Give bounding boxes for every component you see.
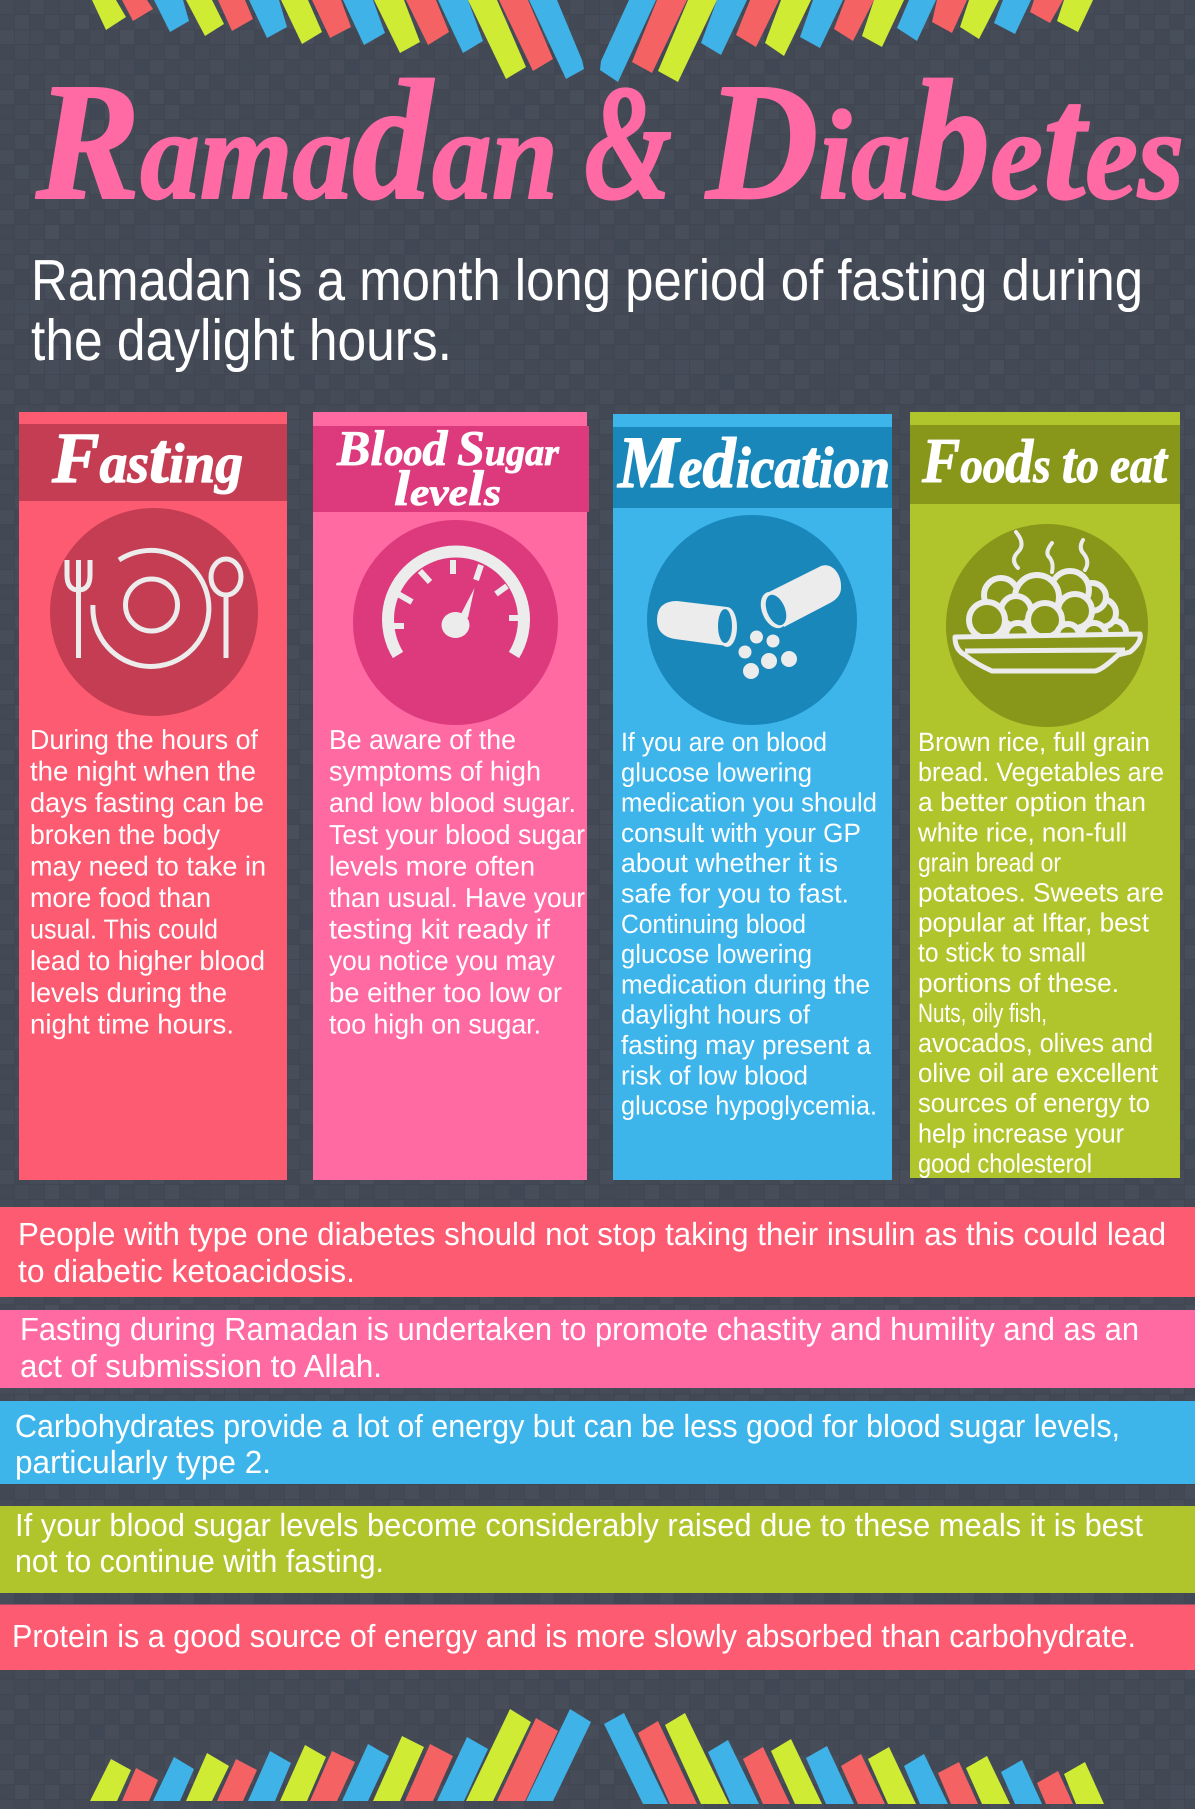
body text: fasting: night time hours. — [30, 1008, 234, 1039]
panel heading: blood sugar levels — [313, 420, 589, 516]
icon: gauge — [353, 520, 558, 725]
body text: foods to eat: portions of these. — [918, 968, 1119, 998]
title: Ramadan — [35, 46, 558, 236]
body text: blood sugar levels: and low blood sugar. — [329, 787, 576, 818]
fact bar: type one diabetes — [0, 1207, 1195, 1297]
body text: medication: consult with your GP — [621, 818, 861, 848]
body text: foods to eat: popular at Iftar, best — [918, 908, 1150, 938]
icon: steaming plate of food — [946, 524, 1148, 727]
body text: medication: about whether it is — [621, 848, 838, 878]
body text: fasting: days fasting can be — [30, 787, 264, 818]
icon: plate with fork and spoon — [50, 508, 258, 716]
top ribbon decoration: right — [600, 0, 1093, 82]
body text: medication: safe for you to fast. — [621, 878, 849, 908]
icon: open capsule pill — [647, 515, 857, 725]
fact bar: carbohydrates: particularly type 2. — [15, 1444, 271, 1480]
panel: medication — [613, 414, 892, 1180]
body text: foods to eat: sources of energy to — [918, 1088, 1150, 1118]
body text: blood sugar levels: too high on sugar. — [329, 1008, 541, 1039]
body text: blood sugar levels: levels more often — [329, 850, 535, 881]
body text: foods to eat: to stick to small — [918, 938, 1086, 968]
fact bar: type one diabetes: People with type one diabetes should not stop taking their insulin as this could lead — [18, 1216, 1166, 1252]
body text: blood sugar levels: Be aware of the — [329, 724, 516, 755]
fact bar: raised blood sugar — [0, 1506, 1195, 1593]
body text: foods to eat: Brown rice, full grain — [918, 727, 1150, 757]
body text: blood sugar levels: than usual. Have your — [329, 882, 585, 913]
body text: foods to eat: bread. Vegetables are — [918, 757, 1164, 787]
body text: fasting: lead to higher blood — [30, 945, 265, 976]
bottom ribbon decoration: left — [90, 1709, 591, 1801]
title — [35, 46, 1184, 236]
panel: blood sugar levels — [313, 412, 589, 1180]
body text: fasting: During the hours of — [30, 724, 258, 755]
body text: blood sugar levels: Test your blood sugar — [329, 819, 585, 850]
intro text — [31, 248, 1143, 373]
body text: foods to eat: Nuts, oily fish, — [918, 998, 1047, 1028]
body text: blood sugar levels: symptoms of high — [329, 756, 541, 787]
bottom ribbon decoration: right — [604, 1713, 1104, 1804]
body text: fasting: the night when the — [30, 756, 256, 787]
body text: fasting: may need to take in — [30, 850, 266, 881]
body text: fasting — [30, 724, 266, 1039]
panel heading: medication: Medication — [617, 422, 890, 504]
body text: fasting: usual. This could — [30, 914, 218, 945]
panel heading: fasting — [19, 418, 287, 501]
panel heading: foods to eat: Foods to eat — [921, 425, 1169, 496]
body text: foods to eat: avocados, olives and — [918, 1028, 1153, 1058]
body text: foods to eat: help increase your — [918, 1118, 1124, 1148]
title: Diabetes — [704, 46, 1184, 236]
body text: foods to eat — [917, 727, 1164, 1178]
panel heading: fasting: Fasting — [51, 418, 243, 498]
body text: blood sugar levels: be either too low or — [329, 977, 562, 1008]
fact bar: carbohydrates — [0, 1401, 1195, 1484]
body text: fasting: broken the body — [30, 819, 220, 850]
body text: medication: glucose lowering — [621, 757, 812, 787]
body text: blood sugar levels: you notice you may — [329, 945, 555, 976]
body text: foods to eat: good cholesterol — [918, 1148, 1092, 1178]
fact bar: type one diabetes: to diabetic ketoacidosis. — [18, 1253, 355, 1289]
fact bar: raised blood sugar: not to continue with fasting. — [15, 1543, 384, 1579]
body text: foods to eat: olive oil are excellent — [918, 1058, 1159, 1088]
top ribbon decoration: left — [92, 0, 584, 79]
body text: medication: daylight hours of — [621, 1000, 811, 1030]
panel heading: blood sugar levels: Blood Sugar — [336, 420, 560, 476]
intro text: the daylight hours. — [31, 308, 452, 373]
body text: blood sugar levels: testing kit ready if — [329, 914, 550, 945]
panel: fasting — [19, 412, 287, 1180]
body text: medication: risk of low blood — [621, 1060, 808, 1090]
body text: foods to eat: grain bread or — [918, 847, 1061, 877]
body text: blood sugar levels — [329, 724, 585, 1039]
body text: foods to eat: white rice, non-full — [917, 817, 1127, 847]
panel heading: blood sugar levels: levels — [394, 460, 501, 516]
fact bar: carbohydrates: Carbohydrates provide a lot of energy but can be less good for blood sugar levels, — [15, 1408, 1120, 1444]
panel: foods to eat — [910, 412, 1180, 1178]
body text: medication: glucose hypoglycemia. — [621, 1091, 877, 1121]
body text: medication: medication you should — [621, 788, 877, 818]
fact bar: protein: Protein is a good source of energy and is more slowly absorbed than carbohydrate. — [12, 1618, 1136, 1654]
fact bar: purpose of fasting: act of submission to Allah. — [20, 1348, 382, 1384]
title: & — [584, 51, 672, 234]
body text: foods to eat: potatoes. Sweets are — [918, 878, 1164, 908]
body text: medication: Continuing blood — [621, 909, 806, 939]
body text: medication: If you are on blood — [621, 727, 827, 757]
fact bar: purpose of fasting — [0, 1310, 1195, 1388]
body text: medication: glucose lowering — [621, 939, 812, 969]
body text: medication: medication during the — [621, 969, 870, 999]
body text: foods to eat: a better option than — [918, 787, 1146, 817]
fact bar: purpose of fasting: Fasting during Ramadan is undertaken to promote chastity and humility and as an — [20, 1311, 1139, 1347]
body text: fasting: levels during the — [30, 977, 227, 1008]
body text: fasting: more food than — [30, 882, 211, 913]
body text: medication — [621, 727, 877, 1121]
fact bar: raised blood sugar: If your blood sugar levels become considerably raised due to these meals it is best — [15, 1507, 1143, 1543]
body text: medication: fasting may present a — [621, 1030, 871, 1060]
fact bar: protein — [0, 1604, 1195, 1670]
